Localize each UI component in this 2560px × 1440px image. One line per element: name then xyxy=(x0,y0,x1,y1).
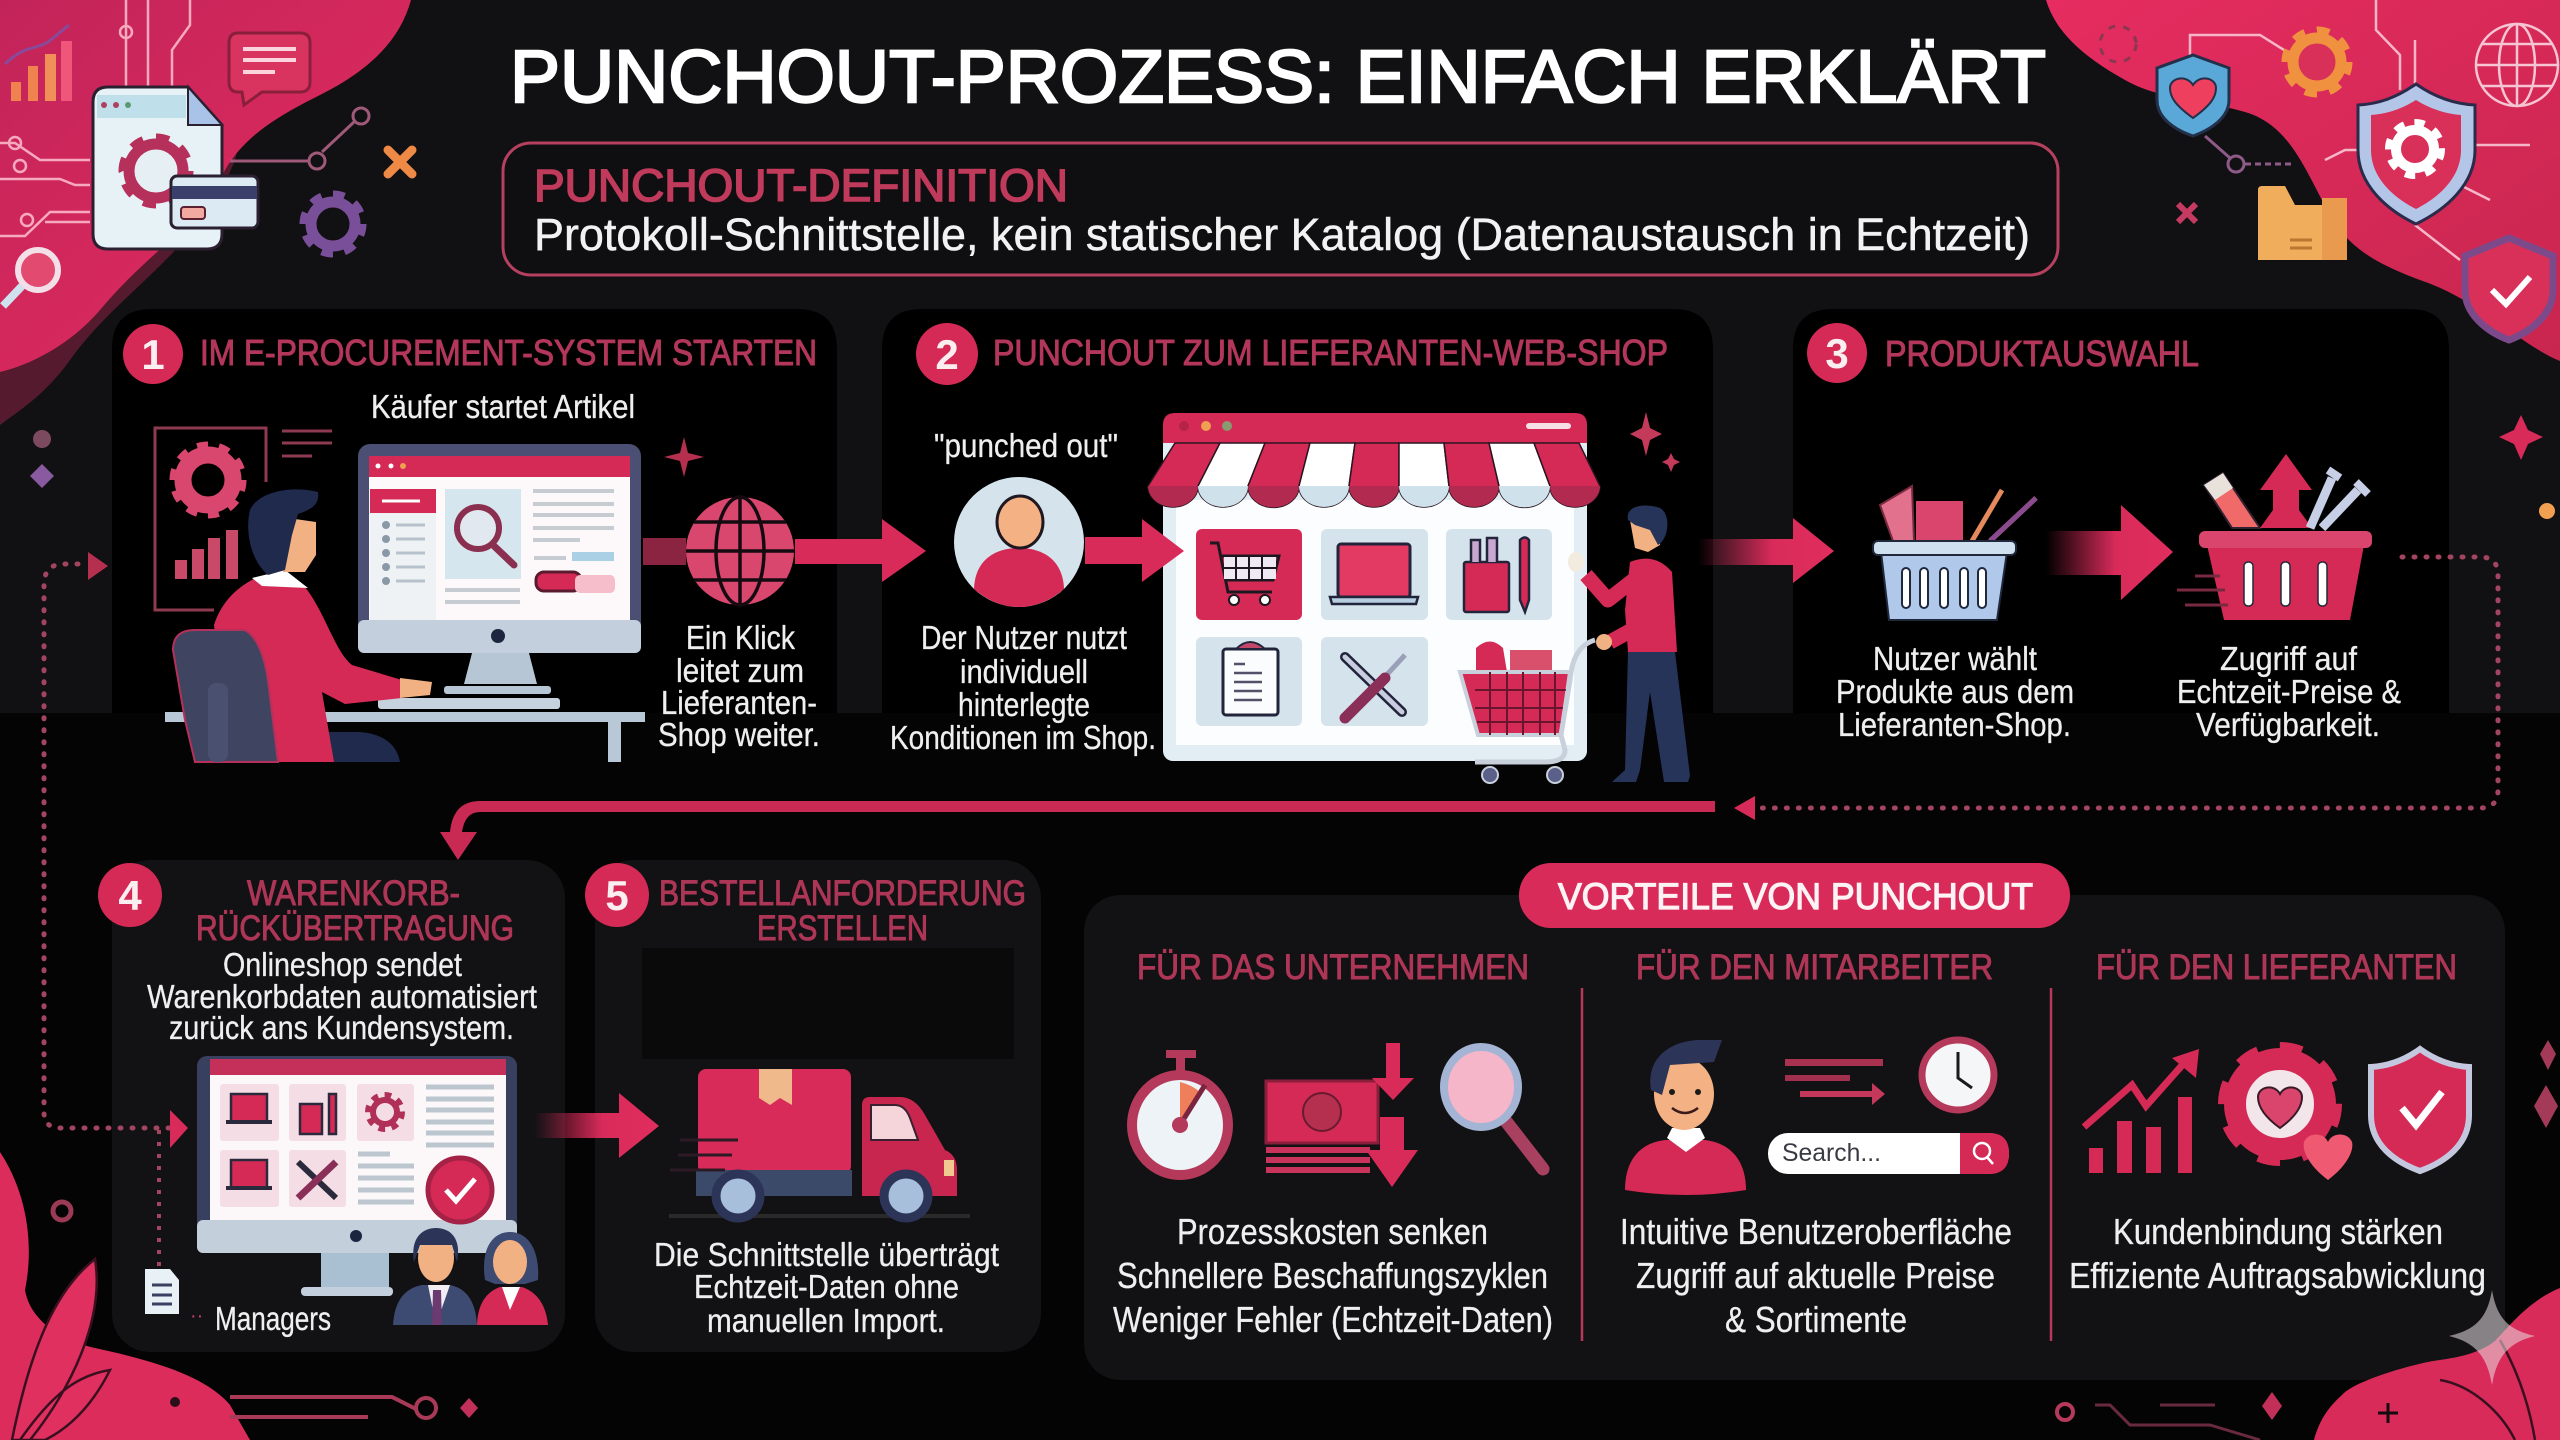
panel: step 4 xyxy=(98,860,565,1352)
text: employee benefits: & Sortimente xyxy=(1725,1299,1907,1340)
tile: clipboard xyxy=(1196,637,1302,726)
icon: blue basket xyxy=(1873,486,2036,620)
heading: step 1: IM E-PROCUREMENT-SYSTEM STARTEN xyxy=(200,332,817,373)
icon: sparkles xyxy=(1630,412,1680,472)
text: realtime access: Echtzeit-Preise & xyxy=(2177,673,2401,710)
text: select products: Produkte aus dem xyxy=(1836,673,2074,710)
text: managers label: ·· xyxy=(190,1305,203,1327)
icon: gear with heart xyxy=(2226,1050,2352,1180)
arrow: step 4 to step 5 xyxy=(534,1093,659,1158)
text: managers label: Managers xyxy=(215,1300,331,1337)
icon: globe xyxy=(686,497,794,605)
icon: bar chart xyxy=(5,25,72,101)
text: supplier benefits xyxy=(2069,1211,2486,1296)
search bar xyxy=(1768,1133,2009,1174)
step number 2: 2 xyxy=(935,331,959,378)
icon: employee portrait xyxy=(1625,1040,1746,1195)
icon: settings frame with gear and bars xyxy=(155,428,332,610)
text: step 1 description: Ein Klick xyxy=(686,619,795,656)
heading: company: FÜR DAS UNTERNEHMEN xyxy=(1137,948,1529,987)
icon: desktop monitor xyxy=(358,444,641,694)
step number 1 xyxy=(123,324,183,384)
banner: benefits title xyxy=(1519,863,2070,928)
text: step 2 description: individuell xyxy=(960,653,1088,690)
icon: monitor with order screen xyxy=(197,1056,517,1296)
text: step 1 description xyxy=(658,619,820,753)
awning xyxy=(1148,443,1600,507)
icon: globe xyxy=(2476,24,2558,106)
column: company xyxy=(1113,948,1553,1340)
heading: employee: FÜR DEN MITARBEITER xyxy=(1636,948,1993,987)
text: realtime access: Verfügbarkeit. xyxy=(2196,706,2380,743)
text: step 2 description: hinterlegte xyxy=(958,686,1090,723)
step number 2 xyxy=(916,323,978,385)
text: step 5 description: manuellen Import. xyxy=(707,1302,945,1339)
icon: heart shield xyxy=(2157,55,2229,136)
text: realtime access xyxy=(2177,640,2401,743)
decoration: bottom-right blob xyxy=(2057,1040,2560,1440)
arrow: dotted connector step 3 to return line xyxy=(1734,557,2498,820)
text: select products: Lieferanten-Shop. xyxy=(1838,706,2071,743)
search bar: Search... xyxy=(1782,1139,1881,1167)
step number 3: 3 xyxy=(1825,330,1849,377)
icon: document xyxy=(145,1269,179,1314)
heading: step 2: PUNCHOUT ZUM LIEFERANTEN-WEB-SHOP xyxy=(993,332,1668,373)
text: step 5 description xyxy=(654,1236,999,1339)
arrow: red return line to step 4 xyxy=(440,801,1715,860)
icon: check shield xyxy=(2371,1049,2469,1171)
tile: tools xyxy=(1321,637,1428,726)
text: managers label xyxy=(190,1300,331,1337)
heading: step 5: ERSTELLEN xyxy=(757,909,928,948)
icon: sparkle xyxy=(664,437,704,477)
icon: shopper person xyxy=(1568,506,1690,782)
heading: step 5: BESTELLANFORDERUNG xyxy=(659,874,1026,913)
banner: benefits title: VORTEILE VON PUNCHOUT xyxy=(1558,876,2033,917)
icon: connector node xyxy=(230,108,369,169)
heading: supplier: FÜR DEN LIEFERANTEN xyxy=(2096,948,2457,987)
icon: money with arrows xyxy=(1266,1043,1418,1187)
text: employee benefits xyxy=(1620,1211,2012,1340)
decoration: diamonds xyxy=(30,430,54,488)
icon: big shield with gear xyxy=(2358,84,2475,224)
icon: managers xyxy=(393,1228,548,1325)
text: supplier benefits: Effiziente Auftragsabwicklung xyxy=(2069,1255,2486,1296)
icon: webshop storefront xyxy=(1148,412,1690,783)
text: step 4 description: Warenkorbdaten automatisiert xyxy=(147,978,537,1015)
text: punched out: "punched out" xyxy=(934,427,1118,464)
title: PUNCHOUT-PROZESS: EINFACH ERKLÄRT xyxy=(510,35,2046,118)
step number 1: 1 xyxy=(141,331,165,378)
icon: connector xyxy=(2205,136,2292,172)
panel: step 3 xyxy=(1793,309,2449,743)
text: step 4 description: zurück ans Kundensystem. xyxy=(169,1009,514,1046)
heading: step 4: WARENKORB- xyxy=(247,874,460,913)
text: company benefits: Weniger Fehler (Echtzeit-Daten) xyxy=(1113,1299,1553,1340)
icon: speed arrows xyxy=(1785,1059,1885,1105)
icon: orange gear xyxy=(2286,31,2348,93)
icon: delivery truck xyxy=(669,1069,970,1218)
icon: orange cross xyxy=(388,150,412,174)
heading: step 3: PRODUKTAUSWAHL xyxy=(1885,333,2199,374)
heading: definition: PUNCHOUT-DEFINITION xyxy=(534,160,1068,211)
dividers xyxy=(1582,988,2051,1341)
text: company benefits xyxy=(1113,1211,1553,1340)
arrow: basket to basket xyxy=(2046,505,2173,600)
text: step 1 description: Shop weiter. xyxy=(658,716,820,753)
tile: laptop xyxy=(1321,529,1428,620)
icon: user avatar xyxy=(954,477,1084,607)
text: step 4 description xyxy=(147,946,537,1046)
panel: step 2 xyxy=(44,309,2560,1440)
watermark: sparkle xyxy=(2449,1290,2535,1385)
text: buyer caption: Käufer startet Artikel xyxy=(371,388,635,425)
icon: growth chart xyxy=(2084,1049,2199,1173)
step number 3 xyxy=(1807,323,1867,383)
text: step 2 description xyxy=(890,619,1156,756)
panel: step 5 xyxy=(585,860,1041,1352)
arrow: monitor to globe xyxy=(643,538,686,565)
icon: pink cross xyxy=(2178,204,2196,222)
text: step 4 description: Onlineshop sendet xyxy=(223,946,462,983)
text: step 2 description: Der Nutzer nutzt xyxy=(921,619,1127,656)
icon: stopwatch xyxy=(1132,1050,1228,1175)
text: realtime access: Zugriff auf xyxy=(2220,640,2358,677)
icon: clock xyxy=(1922,1040,1994,1110)
decoration: top-right blob with icons xyxy=(2046,0,2560,519)
text: select products: Nutzer wählt xyxy=(1873,640,2037,677)
heading: step 4: RÜCKÜBERTRAGUNG xyxy=(196,909,514,948)
text: step 5 description: Echtzeit-Daten ohne xyxy=(694,1268,959,1305)
text: company benefits: Schnellere Beschaffungszyklen xyxy=(1117,1255,1548,1296)
step number 5 xyxy=(585,863,649,927)
step number 4: 4 xyxy=(118,872,142,919)
decoration: bottom-left blob xyxy=(0,1152,478,1440)
heading: step 4 xyxy=(196,874,514,948)
decoration: top-left blob with icons xyxy=(0,0,412,488)
heading: step 5 xyxy=(659,874,1026,948)
icon: magnifier xyxy=(1444,1047,1543,1169)
column: employee xyxy=(1620,948,2012,1340)
text: supplier benefits: Kundenbindung stärken xyxy=(2113,1211,2443,1252)
icon: folder xyxy=(2258,186,2347,260)
icon: document with gear and card xyxy=(93,87,258,249)
arrow: shop to product selection xyxy=(1698,518,1834,583)
icon: check shield xyxy=(2465,238,2553,340)
text: employee benefits: Intuitive Benutzeroberfläche xyxy=(1620,1211,2012,1252)
panel: benefits xyxy=(1084,863,2505,1380)
text: step 1 description: Lieferanten- xyxy=(661,684,817,721)
step number 5: 5 xyxy=(605,872,629,919)
icon: magnifier xyxy=(3,250,58,306)
step number 4 xyxy=(98,863,162,927)
icon: red basket with tools xyxy=(2177,454,2372,620)
decoration: star and dot xyxy=(2499,415,2555,519)
text: definition: Protokoll-Schnittstelle, kein statischer Katalog (Datenaustausch in Echtzeit) xyxy=(534,209,2030,260)
text: step 1 description: leitet zum xyxy=(676,652,804,689)
icon: purple gear xyxy=(304,195,362,253)
text: employee benefits: Zugriff auf aktuelle Preise xyxy=(1636,1255,1995,1296)
icon: chat bubble xyxy=(229,33,310,105)
tile: cart xyxy=(1196,529,1302,620)
icon: seated person with chair and desk xyxy=(165,489,645,762)
arrow: globe to user xyxy=(795,519,926,582)
text: step 2 description: Konditionen im Shop. xyxy=(890,719,1156,756)
column: supplier xyxy=(2069,948,2486,1296)
text: step 5 description: Die Schnittstelle überträgt xyxy=(654,1236,999,1273)
panel: step 1 xyxy=(112,309,837,762)
icon: dashed ring xyxy=(2100,26,2136,62)
icon: shopping cart with bags xyxy=(1460,640,1595,783)
arrow: user to shop xyxy=(1085,519,1184,582)
text: select products xyxy=(1836,640,2074,743)
callout: punchout definition xyxy=(503,143,2058,275)
text: company benefits: Prozesskosten senken xyxy=(1177,1211,1488,1252)
tile: pens xyxy=(1446,529,1552,620)
arrow: left dotted loop xyxy=(44,552,188,1267)
